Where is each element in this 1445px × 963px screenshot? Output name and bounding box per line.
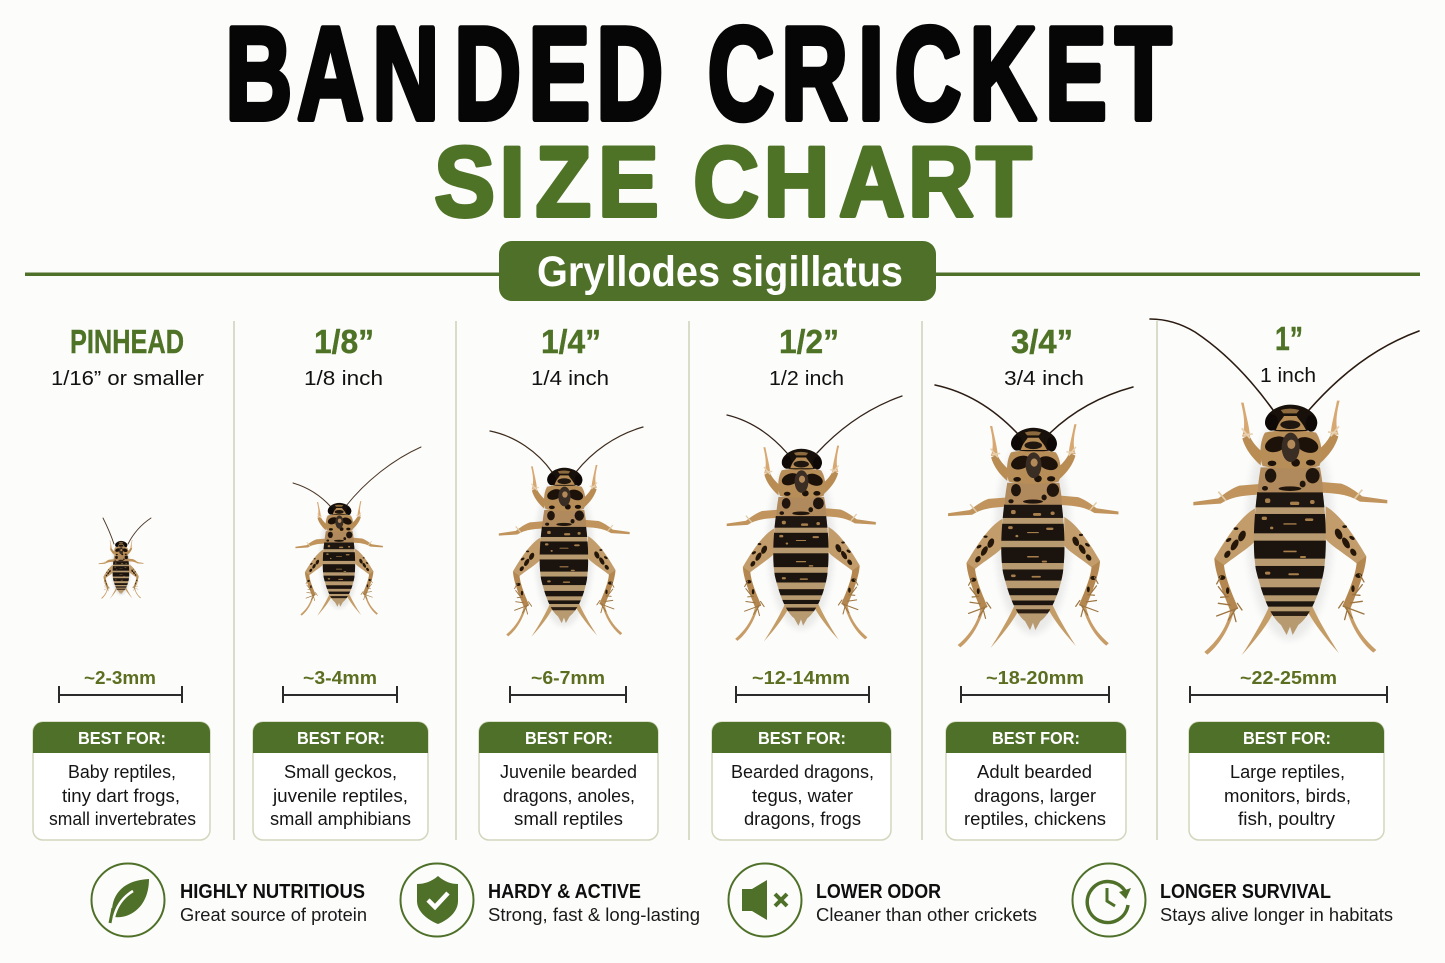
best for box: Large reptiles, — [1230, 762, 1345, 782]
best for box: Adult bearded — [977, 762, 1092, 782]
best for box: tiny dart frogs, — [62, 786, 180, 806]
feature: hardy and active: HARDY & ACTIVE — [488, 881, 641, 903]
size description: 3/4 inch — [1004, 368, 1084, 390]
size heading: 1/4” — [541, 323, 601, 360]
best for box — [1189, 722, 1384, 840]
feature: hardy and active: Strong, fast & long-lasting — [488, 905, 700, 925]
feature: hardy and active — [400, 864, 700, 936]
subtitle: SIZE CHART — [434, 128, 1032, 238]
feature: highly nutritious — [92, 864, 367, 936]
best for box: dragons, frogs — [744, 809, 861, 829]
cricket illustration — [935, 385, 1133, 648]
size heading: 1” — [1275, 320, 1303, 357]
measure: ~12-14mm — [752, 668, 850, 688]
size description: 1/8 inch — [304, 368, 383, 390]
measure: ~22-25mm — [1240, 668, 1337, 688]
best for box: BEST FOR: — [1243, 728, 1331, 748]
column: 1/4 inch — [479, 323, 658, 840]
column: 1/8 inch — [253, 323, 428, 840]
column: 1/2 inch — [712, 323, 902, 840]
best for box: BEST FOR: — [297, 728, 385, 748]
measure — [961, 668, 1109, 703]
best for box: monitors, birds, — [1224, 786, 1351, 806]
best for box: fish, poultry — [1238, 809, 1335, 829]
best for box: tegus, water — [752, 786, 853, 806]
best for box: BEST FOR: — [758, 728, 846, 748]
species banner — [25, 241, 1420, 301]
size description: 1 inch — [1260, 365, 1316, 387]
cricket illustration — [490, 427, 643, 637]
best for box: BEST FOR: — [525, 728, 613, 748]
best for box: small amphibians — [270, 809, 411, 829]
best for box: BEST FOR: — [78, 728, 166, 748]
size description: 1/16” or smaller — [51, 368, 204, 390]
best for box: dragons, larger — [974, 786, 1096, 806]
measure — [510, 668, 626, 703]
measure — [59, 668, 182, 703]
best for box — [712, 722, 891, 840]
icon: leaf — [92, 864, 164, 936]
feature: highly nutritious: Great source of protein — [180, 905, 367, 925]
measure: ~2-3mm — [84, 668, 156, 688]
title: BANDED CRICKET — [225, 1, 1172, 148]
best for box: Bearded dragons, — [731, 762, 874, 782]
measure: ~18-20mm — [986, 668, 1084, 688]
best for box: small invertebrates — [49, 809, 196, 829]
best for box — [946, 722, 1126, 840]
column: 3/4 inch — [935, 323, 1133, 840]
size heading: PINHEAD — [70, 323, 184, 360]
size heading: 1/8” — [314, 323, 374, 360]
feature: lower odor — [728, 864, 1037, 936]
column dividers — [234, 321, 1157, 840]
icon: clock with arrow — [1072, 864, 1146, 936]
measure — [283, 668, 397, 703]
cricket illustration — [1150, 319, 1419, 655]
best for box: juvenile reptiles, — [272, 786, 408, 806]
cricket illustration — [99, 518, 151, 599]
best for box — [479, 722, 658, 840]
measure — [1190, 668, 1387, 703]
measure: ~3-4mm — [303, 668, 377, 688]
feature: lower odor: Cleaner than other crickets — [816, 905, 1037, 925]
best for box — [253, 722, 428, 840]
feature: lower odor: LOWER ODOR — [816, 881, 941, 903]
species banner: Gryllodes sigillatus — [537, 248, 903, 296]
best for box — [33, 722, 210, 840]
cricket illustration — [727, 396, 902, 641]
size heading: 3/4” — [1011, 323, 1073, 360]
size description: 1/2 inch — [769, 368, 844, 390]
best for box: dragons, anoles, — [503, 786, 635, 806]
feature: highly nutritious: HIGHLY NUTRITIOUS — [180, 881, 365, 903]
best for box: Small geckos, — [284, 762, 397, 782]
feature: longer survival: Stays alive longer in habitats — [1160, 905, 1393, 925]
measure: ~6-7mm — [531, 668, 605, 688]
column: 1 inch — [1150, 319, 1419, 840]
best for box: reptiles, chickens — [964, 809, 1106, 829]
best for box: Baby reptiles, — [68, 762, 176, 782]
feature: longer survival — [1072, 864, 1393, 936]
icon: shield — [400, 864, 474, 936]
size heading: 1/2” — [779, 323, 839, 360]
feature: longer survival: LONGER SURVIVAL — [1160, 881, 1331, 903]
cricket illustration — [293, 447, 421, 616]
column: pinhead — [33, 323, 210, 840]
measure — [736, 668, 869, 703]
best for box: BEST FOR: — [992, 728, 1080, 748]
size description: 1/4 inch — [531, 368, 609, 390]
best for box: small reptiles — [514, 809, 623, 829]
best for box: Juvenile bearded — [500, 762, 637, 782]
icon: muted speaker — [728, 864, 802, 936]
